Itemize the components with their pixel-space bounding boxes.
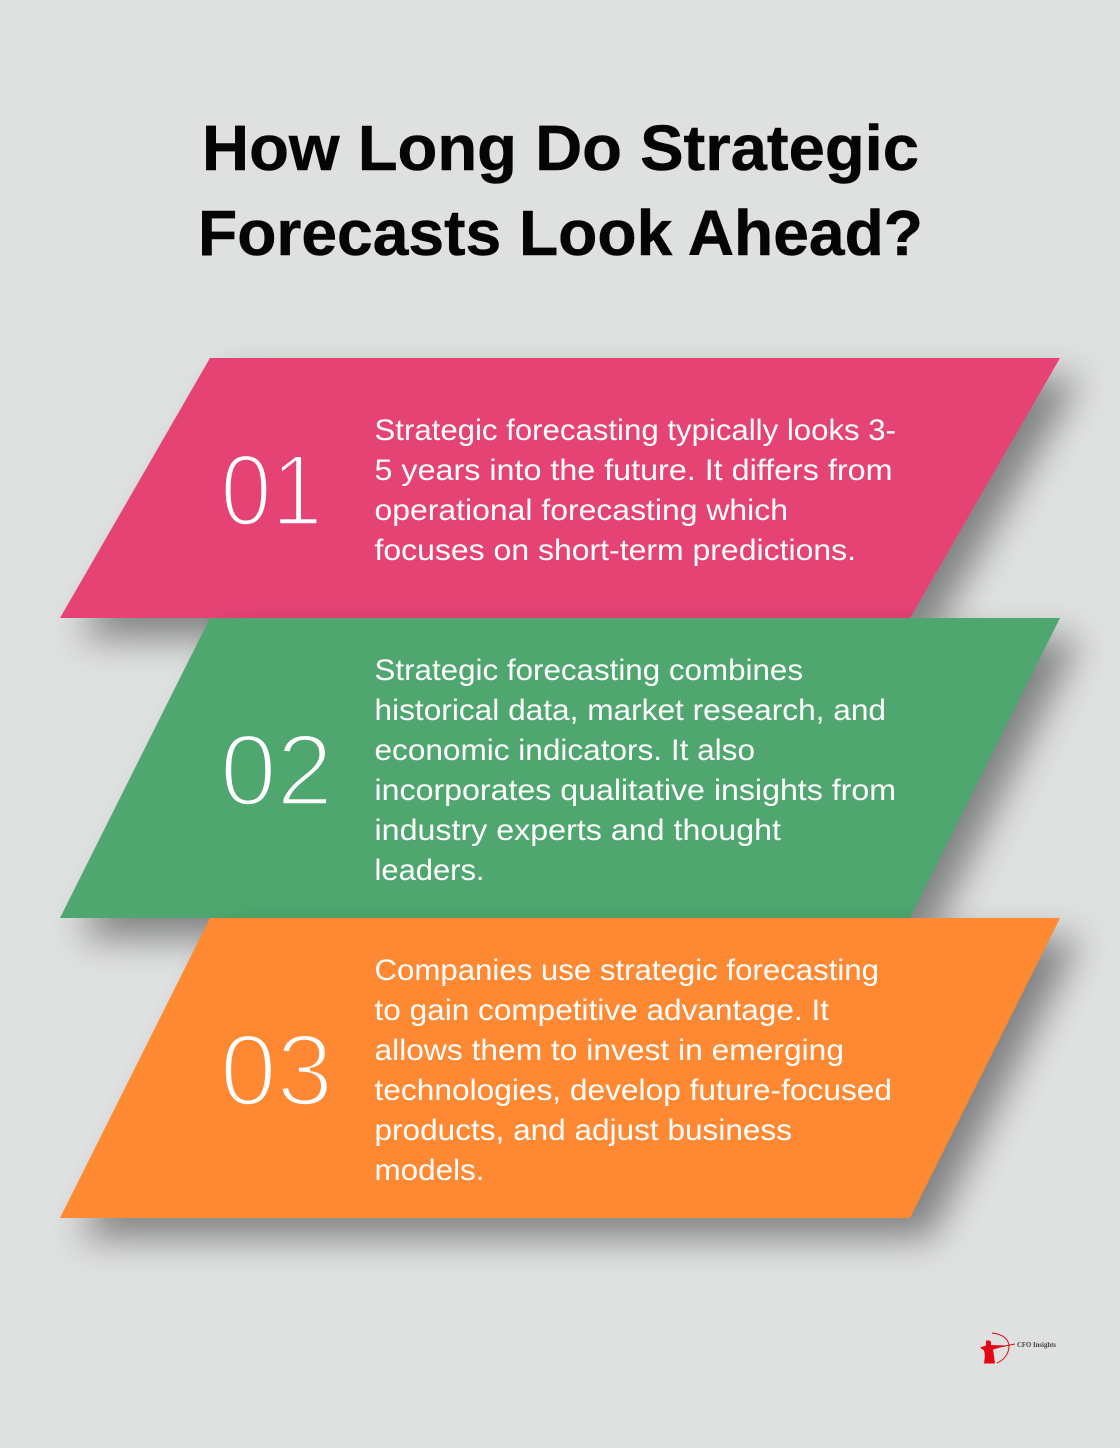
title: Forecasts Look Ahead?: [198, 197, 923, 269]
title: How Long Do Strategic: [202, 112, 919, 184]
logo: CFO Insights archer: [980, 1333, 1056, 1364]
text: step 02 description: industry experts and thought: [374, 814, 782, 847]
number 01: 01: [220, 435, 322, 547]
text: step 01 description: Strategic forecasting typically looks 3-: [374, 414, 896, 447]
text: step 02 description: Strategic forecasting combines: [374, 654, 803, 687]
text: step 03 description: allows them to invest in emerging: [374, 1034, 844, 1067]
text: step 02 description: economic indicators. It also: [374, 734, 755, 767]
title: [198, 112, 923, 269]
text: step 03 description: products, and adjust business: [374, 1114, 792, 1147]
text: step 03 description: [374, 954, 892, 1187]
number 02: 02: [220, 715, 333, 827]
panel: step 02: [60, 618, 1080, 938]
text: step 01 description: operational forecasting which: [374, 494, 788, 527]
text: step 01 description: focuses on short-term predictions.: [374, 534, 856, 567]
panel: step 03: [60, 918, 1080, 1238]
text: step 01 description: 5 years into the future. It differs from: [374, 454, 892, 487]
text: step 01 description: [374, 414, 896, 567]
panel: step 01: [60, 358, 1080, 638]
text: step 03 description: models.: [374, 1154, 484, 1187]
text: step 02 description: leaders.: [374, 854, 484, 887]
number 03: 03: [220, 1015, 333, 1127]
text: step 02 description: [374, 654, 896, 887]
text: step 03 description: to gain competitive advantage. It: [374, 994, 830, 1027]
text: step 02 description: historical data, market research, and: [374, 694, 886, 727]
logo: CFO Insights archer: CFO Insights: [1017, 1341, 1056, 1349]
text: step 03 description: Companies use strategic forecasting: [374, 954, 879, 987]
text: step 02 description: incorporates qualitative insights from: [374, 774, 896, 807]
text: step 03 description: technologies, develop future-focused: [374, 1074, 892, 1107]
